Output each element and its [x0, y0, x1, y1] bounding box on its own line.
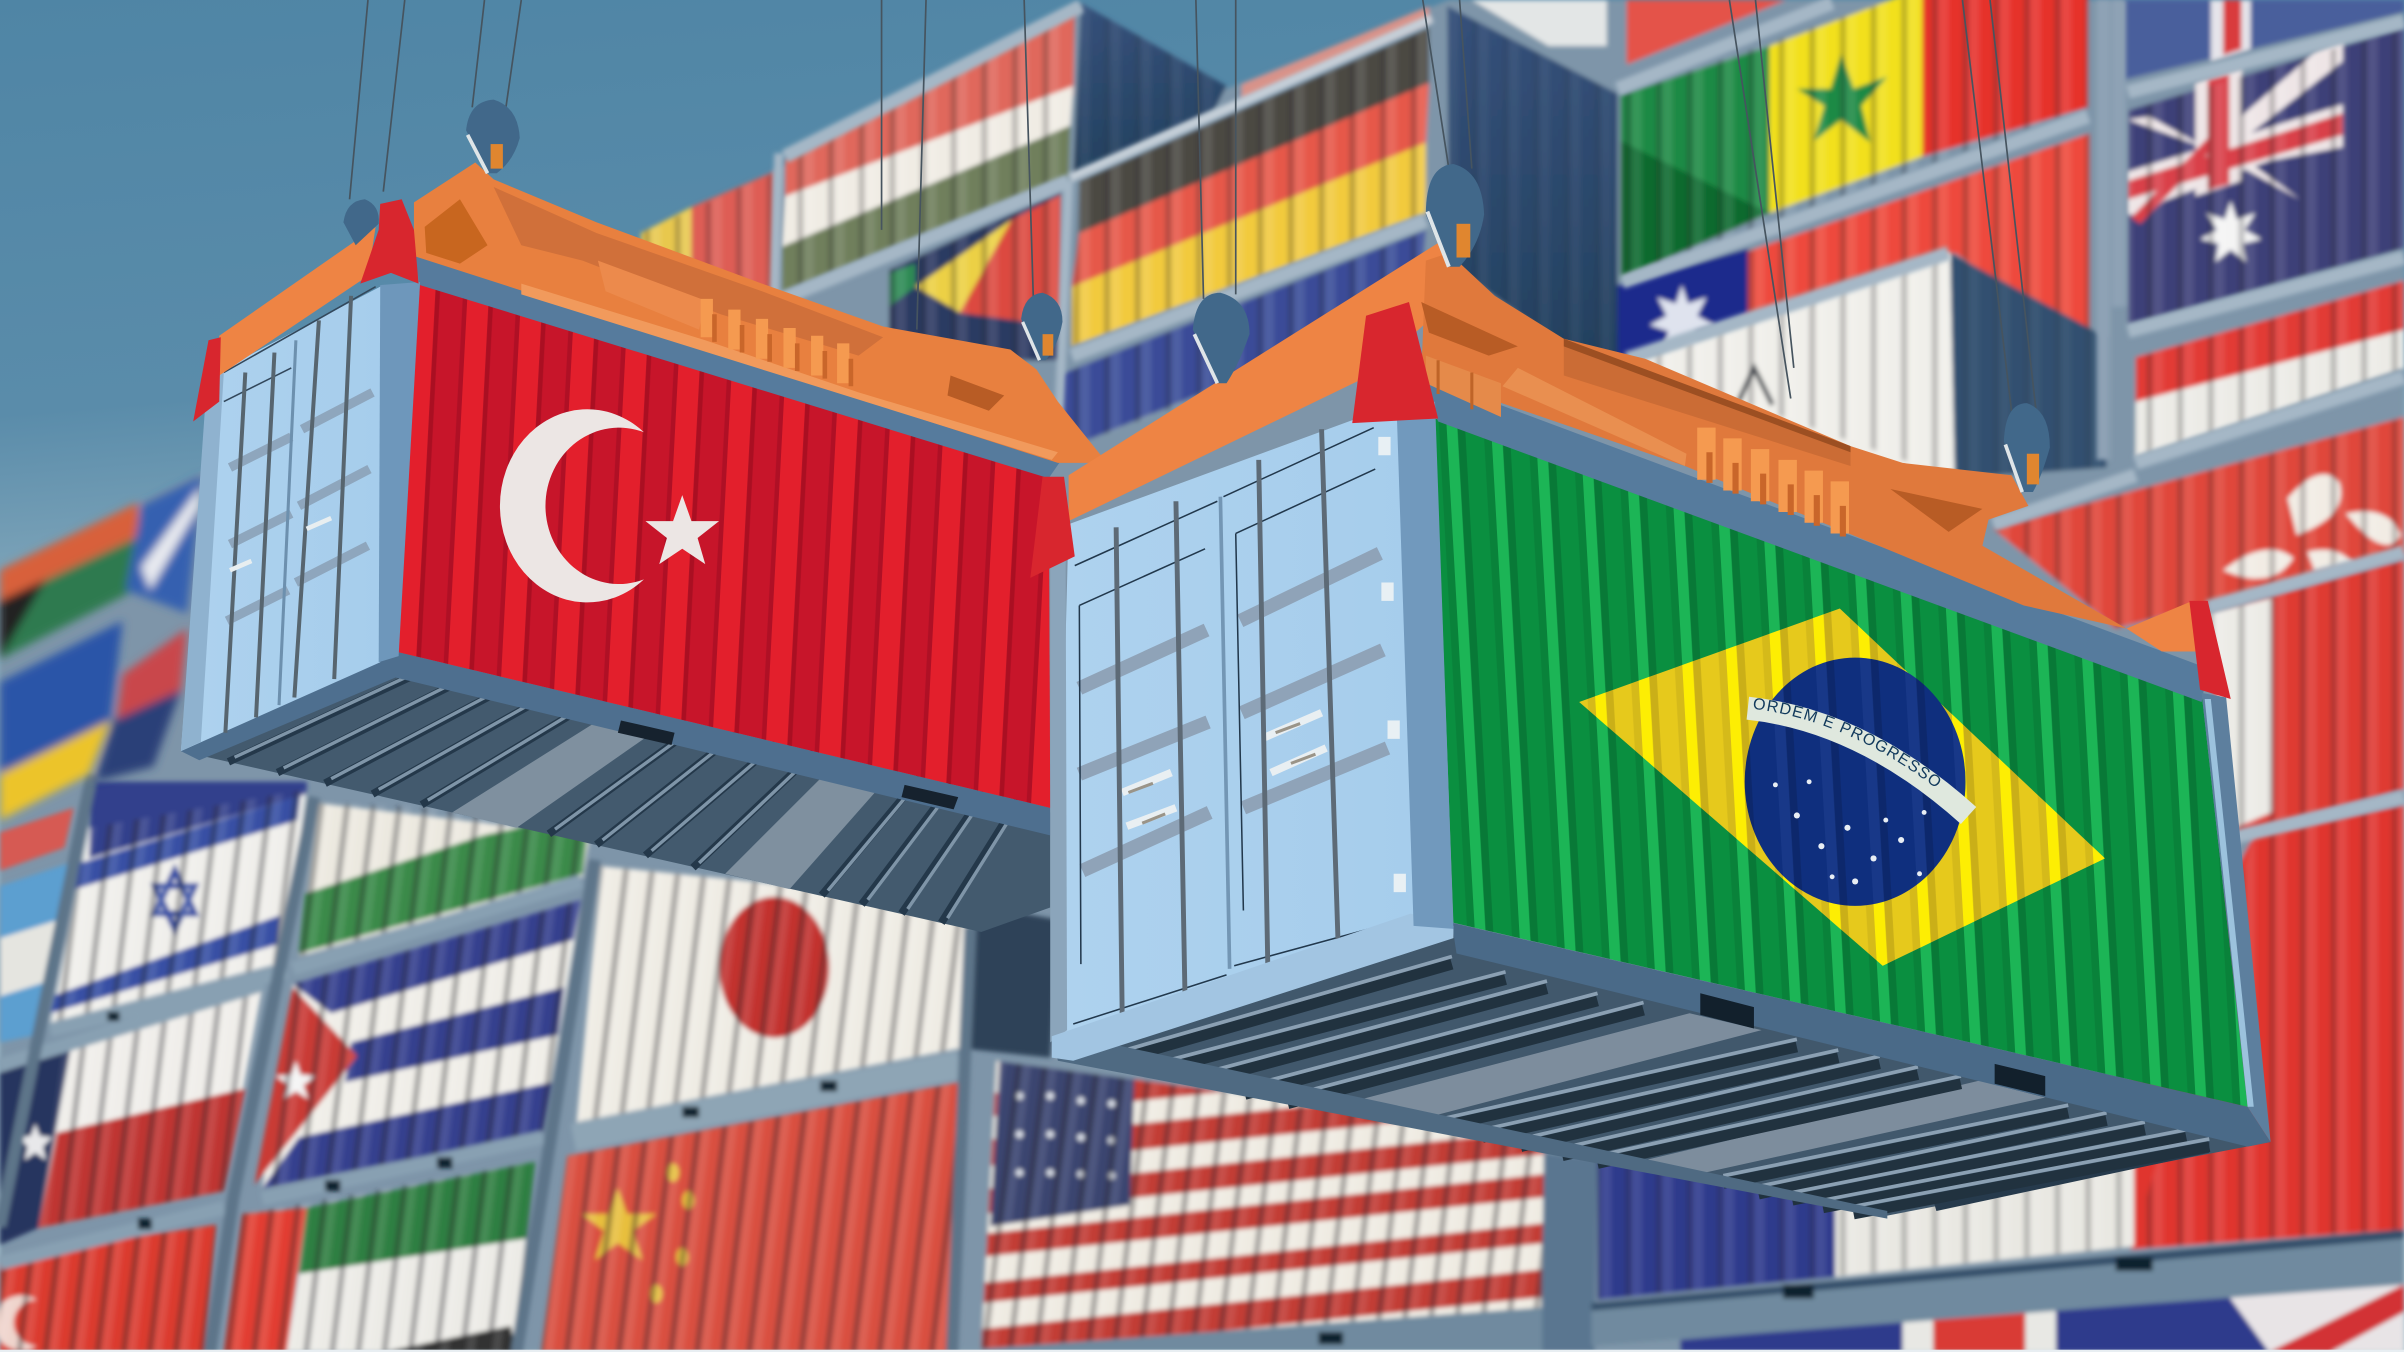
container: Cuba flag	[255, 900, 581, 1188]
red corner caps: Turkey container	[193, 199, 419, 422]
rail pockets	[107, 1012, 837, 1229]
container: top white behind spreader	[1472, 0, 1607, 46]
container: red lower right	[2208, 560, 2404, 835]
container: Turkey flag bottom left	[0, 1225, 216, 1352]
corner fittings: Brazil door	[1378, 437, 1406, 892]
container: blue flag below Germany	[1058, 230, 1426, 452]
container: Australia flag	[2128, 28, 2404, 325]
container: France flag	[1598, 1142, 2134, 1300]
crescent and star	[500, 409, 719, 602]
beam along the flag face	[1452, 923, 2271, 1147]
container: UK flag bottom right	[1680, 1272, 2404, 1352]
side panel behind Japan	[963, 904, 1058, 1058]
door handles	[1122, 713, 1326, 826]
hooks: Brazil container	[1193, 164, 2050, 492]
globe stars	[1773, 779, 1927, 884]
green face: Brazil flag	[1436, 418, 2248, 1107]
teeth: Turkey spreader	[707, 299, 843, 383]
light panels	[1345, 1013, 1762, 1119]
background: frames of upper stacks	[774, 0, 2404, 837]
container: UK flag far left	[95, 475, 202, 782]
door recess bands	[1079, 553, 1388, 871]
container: stripe above Germany	[1242, 6, 1429, 100]
container: Japan flag	[576, 866, 981, 1122]
rail: lower right frame	[1591, 1229, 2404, 1346]
container: red strip left edge	[0, 808, 74, 871]
container: green yellow red flag	[889, 192, 1061, 360]
container: red white flag right	[2136, 281, 2404, 457]
door thin lines	[1073, 428, 1403, 1024]
container: dark side next to Germany	[1447, 6, 1617, 376]
container: Israel flag	[51, 782, 307, 1022]
container: red and yellow flag	[641, 172, 774, 291]
container: South Africa flag	[0, 503, 138, 820]
top rail: Brazil container	[1421, 376, 2208, 702]
thin pale edge along the bottom	[0, 1350, 2404, 1352]
container: Hungary flag upper row	[782, 9, 1075, 293]
container: Chile flag	[0, 989, 262, 1245]
container: China flag	[541, 1082, 960, 1352]
top rail: Turkey container	[414, 256, 1066, 478]
lower beam	[1933, 1142, 2209, 1211]
orange spreader: Turkey container	[219, 162, 1107, 463]
background: lower left flag containers	[0, 774, 1058, 1352]
rail: lower frame below USA	[981, 1308, 1542, 1352]
underside: Turkey container	[181, 651, 1050, 932]
red corner caps: Brazil container	[1030, 302, 2231, 699]
background: far left containers	[0, 475, 202, 820]
red face: Turkey flag	[396, 282, 1050, 808]
right frame: Brazil container	[2202, 693, 2271, 1142]
teeth: Brazil spreader	[1706, 428, 1840, 533]
post between USA and France	[1541, 1153, 1598, 1352]
rails and posts between rows	[0, 774, 970, 1352]
cables: Turkey container	[350, 0, 1033, 330]
hooks: Turkey container	[343, 100, 1062, 360]
container: top red	[1627, 0, 1786, 64]
container: Germany flag	[1072, 28, 1429, 346]
locking bars	[1116, 429, 1338, 1022]
container: Senegal flag	[1621, 0, 2088, 279]
container: Brazil flag (hoisted right)	[1030, 0, 2271, 1220]
container: India style green and white flag	[299, 803, 590, 957]
container: Argentina style left edge	[0, 861, 74, 1042]
motto band	[1746, 696, 1976, 824]
door end: Brazil container	[1050, 402, 1453, 1061]
cables: Brazil container	[1196, 0, 2036, 411]
container: navy side of Hungary stack	[1073, 3, 1227, 178]
bottom sill	[1052, 914, 1453, 1061]
orange spreader: Brazil container	[1069, 239, 2215, 651]
container: Hong Kong flag	[1993, 417, 2404, 628]
door end: Turkey container	[181, 285, 383, 751]
underside: Brazil container	[1055, 923, 2271, 1219]
container: UAE flag	[224, 1162, 535, 1352]
container: Turkey flag (hoisted left)	[181, 0, 1107, 932]
container: white with dark side	[1633, 253, 2107, 478]
container: red right bottom	[2131, 805, 2404, 1249]
blue globe	[1745, 658, 1966, 906]
container: USA flag	[981, 1035, 1548, 1352]
corner post: Brazil container	[1397, 402, 1453, 929]
container: top right blue	[2123, 0, 2404, 80]
motto band: ORDEM E PROGRESSO	[1754, 698, 1940, 786]
corner post: Turkey container	[379, 282, 420, 662]
yellow rhombus	[1579, 609, 2105, 966]
container: Taiwan and red flag	[1617, 133, 2090, 362]
